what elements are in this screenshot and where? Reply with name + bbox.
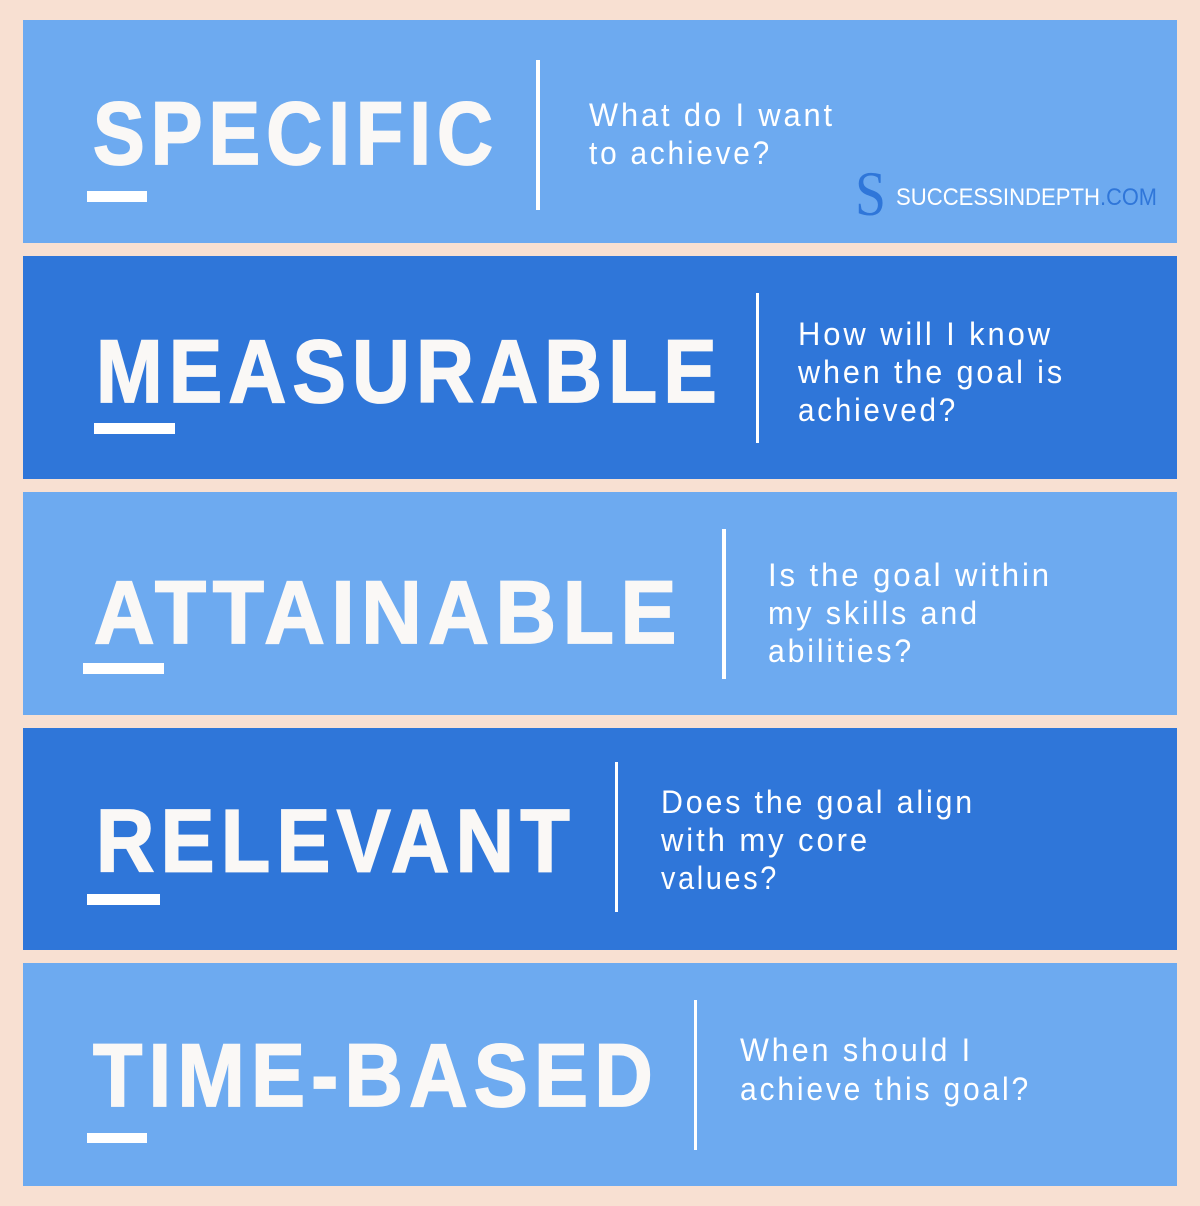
text: measurable question: How will I know: [798, 316, 1053, 352]
heading: specific: SPECIFIC: [93, 83, 499, 183]
underline: specific: [87, 191, 147, 202]
logo: successindepth: .COM: [1100, 184, 1157, 211]
panel: attainable: [23, 492, 1177, 715]
text: time-based question: achieve this goal?: [740, 1071, 1031, 1107]
text: relevant question: values?: [661, 860, 779, 896]
text: specific question: What do I want: [589, 97, 835, 133]
logo: successindepth: SUCCESSINDEPTH: [896, 184, 1100, 211]
divider: attainable: [722, 529, 726, 679]
divider: measurable: [756, 293, 759, 443]
text: specific question: to achieve?: [589, 135, 772, 171]
text: measurable question: when the goal is: [797, 354, 1065, 390]
underline: time-based: [87, 1133, 147, 1143]
text: attainable question: abilities?: [768, 633, 914, 669]
text: measurable question: achieved?: [798, 392, 958, 428]
text: attainable question: [768, 557, 1052, 669]
heading: attainable: ATTAINABLE: [94, 562, 683, 662]
panel: measurable: [23, 256, 1177, 479]
logo: successindepth: S: [855, 158, 886, 229]
divider: time-based: [694, 1000, 697, 1150]
heading: relevant: RELEVANT: [96, 790, 576, 890]
text: relevant question: [660, 784, 975, 896]
divider: specific: [536, 60, 540, 210]
panel: relevant: [23, 728, 1177, 950]
logo: successindepth: [855, 158, 1157, 229]
heading: time-based: TIME-BASED: [93, 1025, 659, 1125]
text: measurable question: [797, 316, 1065, 428]
text: specific question: [589, 97, 835, 171]
divider: relevant: [615, 762, 618, 912]
text: attainable question: Is the goal within: [768, 557, 1052, 593]
underline: measurable: [94, 423, 175, 434]
text: relevant question: Does the goal align: [661, 784, 975, 820]
panel: specific: [23, 20, 1177, 243]
panel: time-based: [23, 963, 1177, 1186]
heading: measurable: MEASURABLE: [96, 321, 723, 421]
underline: attainable: [83, 663, 164, 674]
text: time-based question: When should I: [740, 1032, 973, 1068]
text: relevant question: with my core: [660, 822, 870, 858]
underline: relevant: [87, 894, 160, 905]
text: attainable question: my skills and: [768, 595, 980, 631]
text: time-based question: [740, 1032, 1031, 1107]
